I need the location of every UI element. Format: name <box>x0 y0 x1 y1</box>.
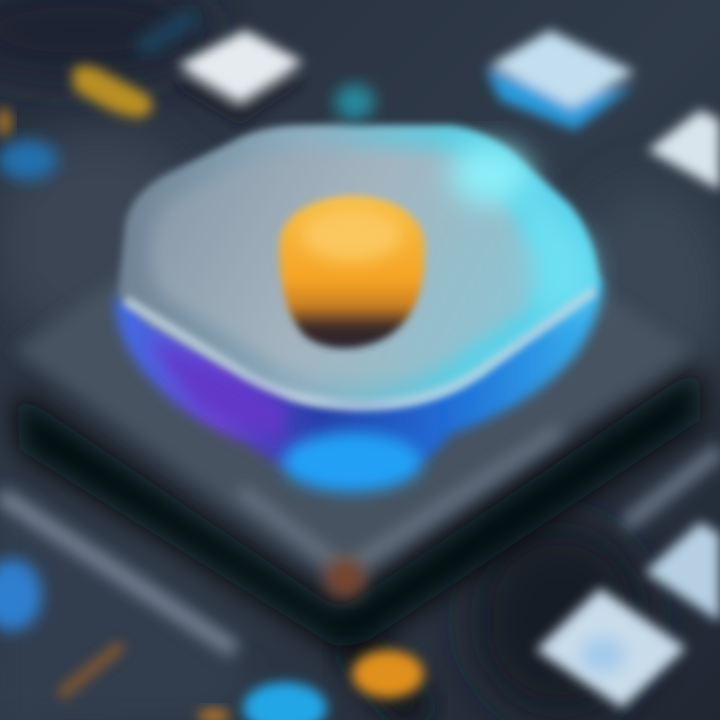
orange blob bottom <box>352 650 424 698</box>
bowl blue glow <box>282 432 422 492</box>
tile: top white <box>172 30 305 126</box>
bowl inner surface <box>150 148 546 384</box>
blue blob left <box>0 140 58 180</box>
cyan blob bottom <box>243 682 327 720</box>
bowl cyan highlight <box>450 145 530 205</box>
platform shadow <box>15 365 700 650</box>
bowl blue rim <box>115 280 602 479</box>
platform lower edge <box>240 430 560 570</box>
bowl purple glow <box>150 340 285 440</box>
platform <box>15 120 690 590</box>
tile: lower right blue centre <box>581 637 625 673</box>
bowl pale rim edge <box>125 290 595 406</box>
rust spot below platform <box>325 558 365 598</box>
tile: right lower edge <box>645 522 720 622</box>
teal dot top <box>335 84 375 120</box>
bowl cyan right side <box>520 180 590 320</box>
orange dash lower left <box>60 645 122 695</box>
tile: top right blue <box>485 30 635 130</box>
tile: right edge <box>648 110 720 190</box>
bowl <box>115 125 602 492</box>
tile: lower right <box>536 588 686 708</box>
orange spot bottom <box>198 708 230 720</box>
bowl glass body <box>118 125 600 405</box>
orange cylinder <box>280 196 425 348</box>
blue dash top <box>140 15 195 50</box>
orange spot left <box>0 108 12 136</box>
orange pill top left <box>72 65 152 118</box>
blue blob lower left <box>0 559 42 631</box>
